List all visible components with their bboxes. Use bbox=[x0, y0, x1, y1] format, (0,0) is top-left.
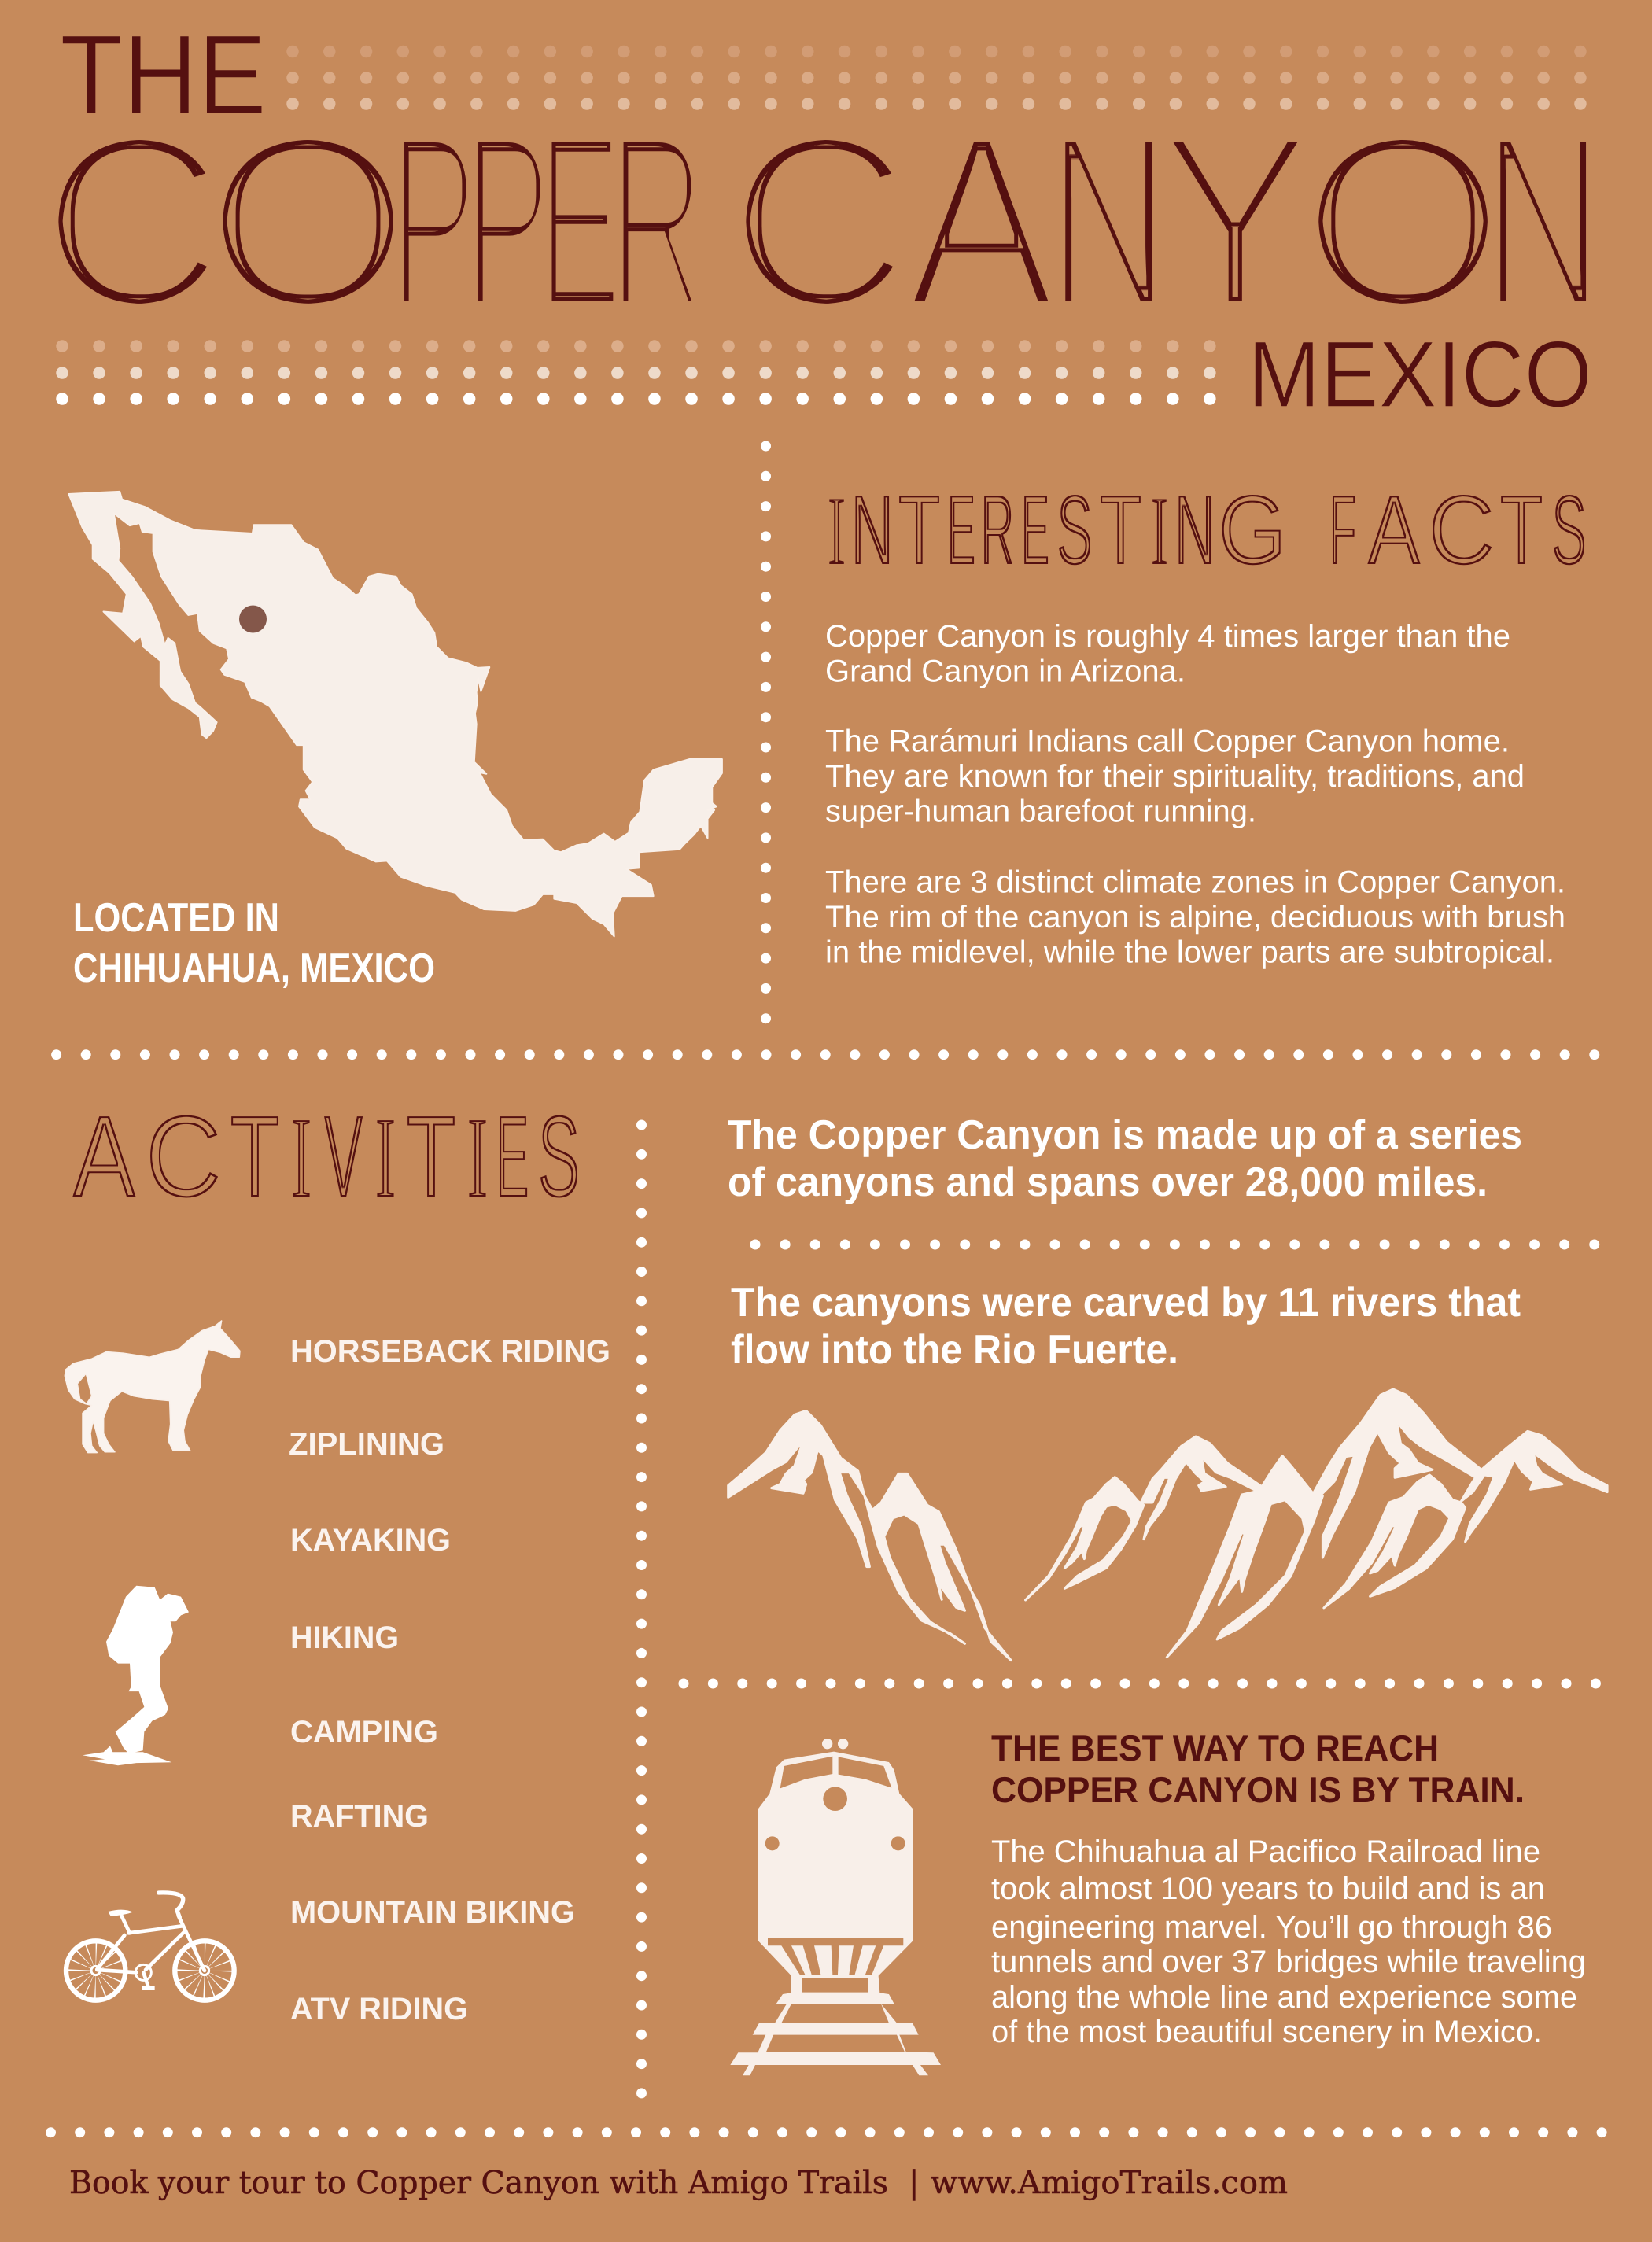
text block: interesting facts: The rim of the canyon is alpine, deciduous with brush bbox=[825, 900, 1565, 935]
heading: interesting facts: I bbox=[1151, 477, 1168, 586]
heading: activities: I bbox=[467, 1093, 488, 1222]
title: THE: THE bbox=[60, 11, 267, 138]
map caption: CHIHUAHUA, MEXICO bbox=[73, 946, 435, 991]
icon: train bbox=[730, 1739, 941, 2075]
heading: interesting facts: G bbox=[1218, 474, 1287, 585]
heading: activities: E bbox=[496, 1092, 529, 1222]
callout: carved by rivers: The canyons were carved by 11 rivers that bbox=[731, 1280, 1521, 1326]
activity list bbox=[289, 1334, 610, 2026]
heading: best way to reach: THE BEST WAY TO REACH bbox=[991, 1728, 1439, 1768]
heading: interesting facts: I bbox=[828, 477, 846, 586]
title: COPPER CANYON: A bbox=[906, 84, 1057, 358]
heading: activities: I bbox=[374, 1093, 396, 1222]
location marker bbox=[239, 606, 267, 632]
title: COPPER CANYON: C bbox=[729, 84, 910, 358]
map of Mexico with Chihuahua marker bbox=[68, 492, 722, 936]
title: COPPER CANYON: Y bbox=[1159, 84, 1312, 358]
callout: series of canyons bbox=[728, 1112, 1522, 1205]
heading: interesting facts: C bbox=[1428, 474, 1495, 585]
text block: railroad: engineering marvel. You’ll go through 86 bbox=[991, 1910, 1552, 1945]
title: COPPER CANYON: R bbox=[609, 84, 705, 358]
text block: railroad: of the most beautiful scenery in Mexico. bbox=[991, 2015, 1542, 2049]
text block: interesting facts: Copper Canyon is roughly 4 times larger than the bbox=[825, 619, 1510, 654]
title: MEXICO: MEXICO bbox=[1248, 322, 1592, 427]
callout: carved by rivers bbox=[731, 1280, 1521, 1373]
text block: railroad: took almost 100 years to build and is an bbox=[991, 1871, 1545, 1906]
icon: bicycle bbox=[66, 1893, 234, 2000]
heading: interesting facts: R bbox=[980, 474, 1015, 585]
activity list: ZIPLINING bbox=[289, 1427, 444, 1462]
footer: | bbox=[909, 2165, 919, 2201]
callout: series of canyons: of canyons and spans over 28,000 miles. bbox=[728, 1160, 1488, 1205]
heading: activities: C bbox=[145, 1092, 222, 1222]
activity list: RAFTING bbox=[290, 1799, 429, 1834]
map caption bbox=[73, 895, 435, 991]
heading: activities: I bbox=[291, 1093, 312, 1222]
icon: mountains bbox=[728, 1389, 1607, 1661]
activity list: MOUNTAIN BIKING bbox=[290, 1895, 575, 1930]
title: COPPER CANYON: C bbox=[42, 84, 225, 358]
title: COPPER CANYON: N bbox=[1048, 84, 1170, 358]
title: COPPER CANYON: E bbox=[537, 84, 622, 358]
callout: series of canyons: The Copper Canyon is made up of a series bbox=[728, 1112, 1522, 1158]
activity list: KAYAKING bbox=[290, 1523, 451, 1558]
heading: best way to reach: COPPER CANYON IS BY TRAIN. bbox=[991, 1769, 1525, 1810]
heading: interesting facts: N bbox=[1174, 474, 1215, 585]
heading: interesting facts: A bbox=[1367, 474, 1421, 585]
heading: activities: T bbox=[230, 1092, 280, 1222]
activity list: HORSEBACK RIDING bbox=[290, 1334, 610, 1369]
heading: interesting facts: E bbox=[1021, 474, 1049, 585]
heading: interesting facts: S bbox=[1056, 474, 1093, 585]
text block: interesting facts bbox=[825, 619, 1565, 969]
title: COPPER CANYON: O bbox=[1303, 84, 1504, 358]
heading: interesting facts: N bbox=[850, 474, 894, 585]
heading: interesting facts: T bbox=[1099, 474, 1142, 585]
text block: interesting facts: super-human barefoot running. bbox=[825, 795, 1256, 829]
text block: interesting facts: Grand Canyon in Arizona. bbox=[825, 655, 1186, 689]
footer bbox=[69, 2165, 1288, 2201]
heading: interesting facts: T bbox=[898, 474, 941, 585]
text block: railroad: The Chihuahua al Pacifico Railroad line bbox=[991, 1835, 1540, 1869]
icon: horse bbox=[65, 1321, 240, 1453]
text block: railroad: tunnels and over 37 bridges while traveling bbox=[991, 1945, 1586, 1979]
activity list: CAMPING bbox=[290, 1715, 438, 1750]
heading: activities: V bbox=[324, 1092, 363, 1222]
title: COPPER CANYON: O bbox=[206, 84, 410, 358]
text block: railroad: along the whole line and experience some bbox=[991, 1980, 1577, 2015]
activity list: HIKING bbox=[290, 1621, 399, 1655]
heading: interesting facts: S bbox=[1551, 474, 1587, 585]
heading: activities: T bbox=[406, 1092, 456, 1222]
text block: interesting facts: They are known for their spirituality, traditions, and bbox=[825, 759, 1525, 794]
heading: best way to reach bbox=[991, 1728, 1525, 1810]
text block: interesting facts: The Rarámuri Indians call Copper Canyon home. bbox=[825, 724, 1510, 758]
text block: interesting facts: There are 3 distinct climate zones in Copper Canyon. bbox=[825, 865, 1565, 900]
text block: interesting facts: in the midlevel, while the lower parts are subtropical. bbox=[825, 935, 1554, 969]
footer: www.AmigoTrails.com bbox=[931, 2165, 1288, 2201]
footer: Book your tour to Copper Canyon with Amigo Trails bbox=[69, 2165, 888, 2201]
text block: railroad bbox=[991, 1835, 1586, 2049]
map caption: LOCATED IN bbox=[73, 895, 279, 941]
heading: activities: S bbox=[537, 1092, 581, 1222]
map silhouette bbox=[68, 492, 722, 936]
icon: hiker bbox=[83, 1586, 189, 1765]
activity list: ATV RIDING bbox=[290, 1992, 468, 2026]
callout: carved by rivers: flow into the Rio Fuerte. bbox=[731, 1327, 1178, 1373]
title: COPPER CANYON: P bbox=[463, 84, 551, 358]
heading: interesting facts: E bbox=[947, 474, 975, 585]
heading: interesting facts: F bbox=[1329, 474, 1357, 585]
heading: activities: A bbox=[72, 1092, 136, 1222]
heading: interesting facts: T bbox=[1499, 474, 1543, 585]
title: COPPER CANYON: P bbox=[389, 84, 478, 358]
